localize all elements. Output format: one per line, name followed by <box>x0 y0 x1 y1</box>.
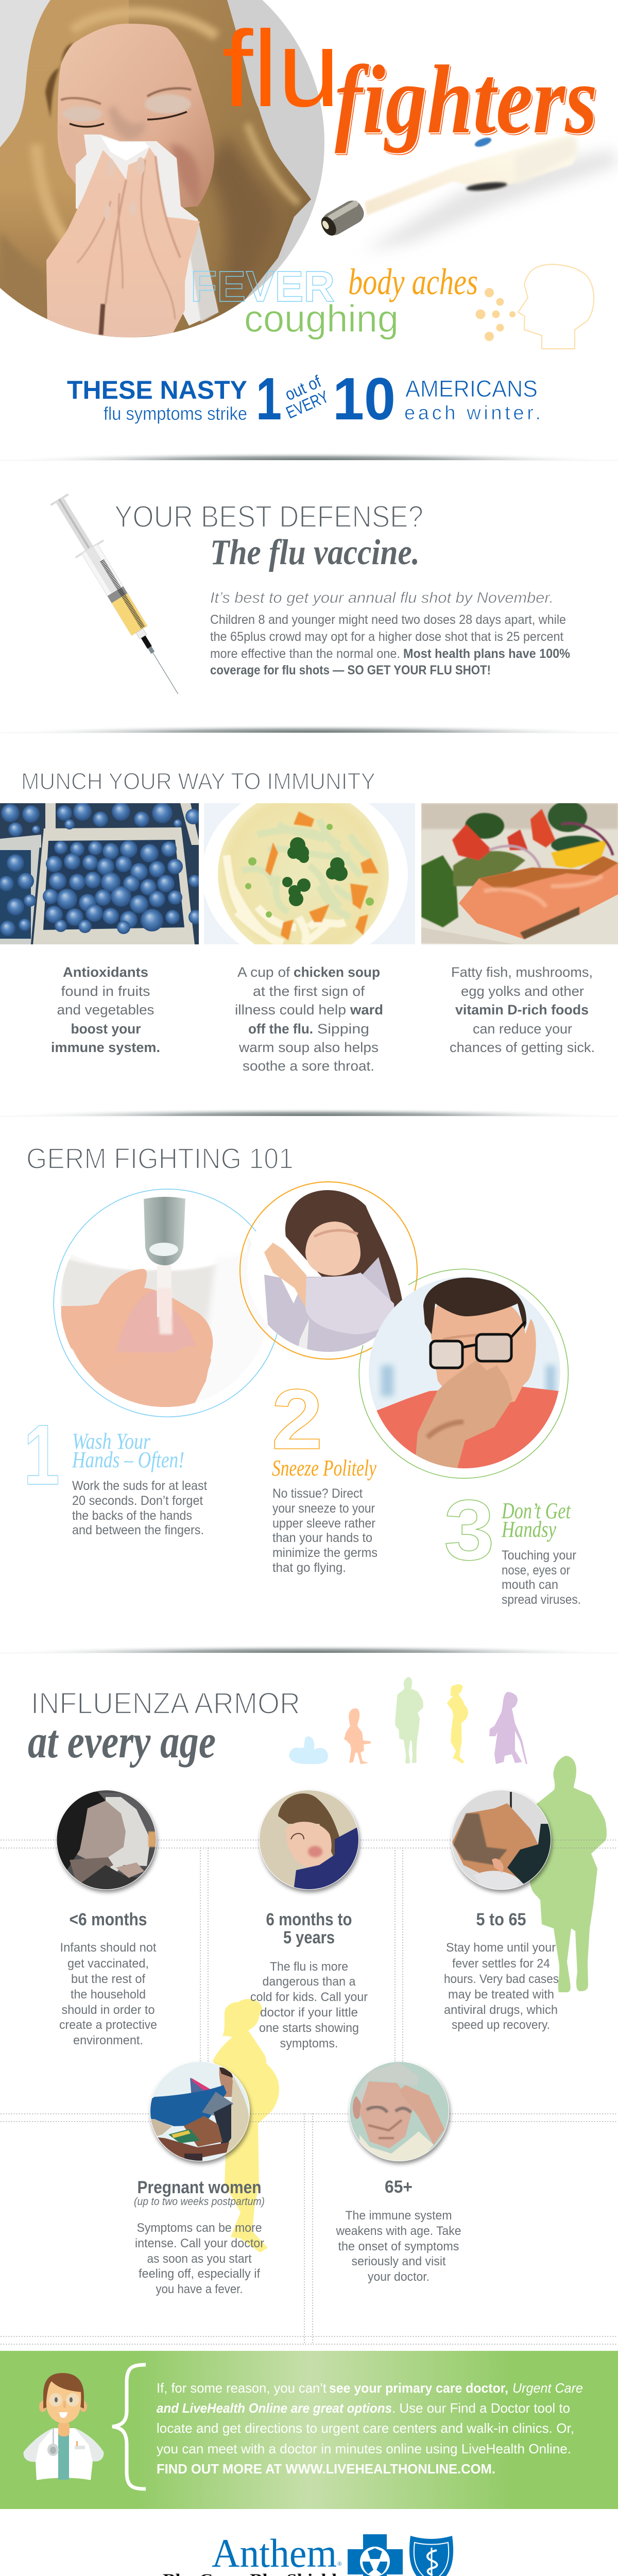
text: pregnant women: feeling off, especially if <box>139 2267 260 2281</box>
text: chicken soup: Sipping <box>317 1021 369 1037</box>
tip 2: sneeze politely: minimize the germs <box>272 1546 377 1560</box>
text: 6 months to 5 years: 5 years <box>283 1928 335 1947</box>
text: 65 plus: seriously and visit <box>351 2255 446 2268</box>
text: pregnant women: as soon as you start <box>147 2252 252 2266</box>
text: 5 to 65: hours. Very bad cases <box>444 1972 559 1986</box>
text: vaccine advice: the 65plus crowd may opt for a higher dose shot that is 25 percent <box>210 630 563 644</box>
stat: these nasty flu symptoms strike 1 out of every 10 Americans each winter <box>67 365 541 432</box>
section divider <box>0 725 618 741</box>
text: 6 months to 5 years: 6 months to <box>266 1910 352 1929</box>
heading: germ fighting 101: GERM FIGHTING 101 <box>26 1142 294 1175</box>
text: chicken soup: illness could help <box>235 1002 346 1018</box>
text: pregnant women: (up to two weeks postpartum) <box>134 2196 265 2208</box>
text: urgent care options: you can meet with a doctor in minutes online using LiveHealth Online. <box>157 2441 571 2456</box>
stat: these nasty flu symptoms strike 1 out of every 10 Americans each winter: out of <box>282 371 324 404</box>
text: 5 to 65: Stay home until your <box>446 1941 556 1955</box>
photo: sneezing into sleeve <box>249 1190 402 1352</box>
text: 65 plus: your doctor. <box>368 2270 430 2284</box>
tip 3: don't get handsy: nose, eyes or <box>502 1563 570 1578</box>
text: 6 months to 5 years: cold for kids. Call your <box>250 1990 368 2004</box>
text: under 6 months: Infants should not <box>60 1941 157 1955</box>
text: vaccine advice: coverage for flu shots — SO GET YOUR FLU SHOT! <box>210 663 491 677</box>
text: vitamin D foods: vitamin D-rich foods <box>455 1002 589 1018</box>
text: chicken soup: chicken soup <box>294 964 380 980</box>
text: vitamin D foods: Fatty fish, mushrooms, <box>451 964 593 980</box>
text: urgent care options: and LiveHealth Online are great options <box>157 2400 392 2416</box>
section divider <box>0 452 618 468</box>
silhouette: large pregnant woman behind text <box>213 1999 279 2252</box>
text: urgent care options <box>157 2380 583 2477</box>
text: urgent care options: . Use our Find a Doctor tool to <box>392 2400 570 2416</box>
text: chicken soup: off the flu. <box>248 1021 313 1037</box>
photo: pregnant woman reading <box>150 2061 250 2161</box>
photo: man touching nose <box>369 1277 561 1473</box>
number 1: 1 <box>24 1408 60 1503</box>
silhouettes: stages of life <box>289 1677 527 1764</box>
heading: influenza armor: INFLUENZA ARMOR <box>31 1687 300 1720</box>
tip 3: don't get handsy: mouth can <box>502 1578 558 1592</box>
text: 65 plus: The immune system <box>345 2209 452 2223</box>
text: antioxidants: and vegetables <box>57 1002 154 1018</box>
section divider <box>0 1645 618 1661</box>
tip 3: don't get handsy <box>444 1483 581 1607</box>
tip 3: don't get handsy: Handsy <box>501 1517 556 1542</box>
text: 65 plus: the onset of symptoms <box>338 2240 459 2253</box>
stat: these nasty flu symptoms strike 1 out of every 10 Americans each winter: each winter. <box>404 402 541 424</box>
text: antioxidants: found in fruits <box>61 984 150 999</box>
ring: hand washing <box>54 1189 277 1417</box>
icon: coughing head with droplets <box>476 264 594 349</box>
text: urgent care options: FIND OUT MORE AT WWW.LIVEHEALTHONLINE.COM. <box>157 2461 495 2477</box>
number 2: 2 <box>271 1372 323 1467</box>
silhouette: pregnant woman <box>447 1684 468 1764</box>
text: 5 to 65: may be treated with <box>448 1988 554 2002</box>
icon: doctor <box>24 2373 104 2480</box>
photo: salmon with salad <box>421 801 618 944</box>
text: pregnant women: you have a fever. <box>156 2282 243 2296</box>
text: antioxidants <box>51 964 160 1055</box>
thermometer <box>317 135 618 251</box>
text: 6 months to 5 years: one starts showing <box>259 2021 359 2035</box>
text: under 6 months: <6 months <box>69 1910 147 1929</box>
panel: find a doctor band <box>0 2351 618 2509</box>
text: chicken soup <box>235 964 383 1074</box>
silhouette: large man behind text <box>530 1756 607 1992</box>
text: 65 plus <box>336 2177 461 2284</box>
silhouette: baby <box>289 1736 328 1764</box>
text: under 6 months: create a protective <box>59 2018 157 2032</box>
logo: Anthem BlueCross BlueShield: ® <box>337 2560 342 2567</box>
text: 6 months to 5 years: doctor if your little <box>260 2006 358 2020</box>
icon: blue cross <box>348 2534 403 2576</box>
ring: touching face <box>359 1269 568 1478</box>
photo: sleeping baby <box>57 1790 157 1891</box>
tip 2: sneeze politely: Sneeze Politely <box>272 1455 376 1481</box>
text: 5 to 65: antiviral drugs, which <box>444 2003 558 2017</box>
hero photo: woman sneezing into tissue <box>0 0 324 341</box>
text: pregnant women: Symptoms can be more <box>137 2221 262 2235</box>
symptom word: fever: FEVER <box>191 262 335 311</box>
ring: sneeze <box>240 1182 417 1359</box>
text: vitamin D foods: egg yolks and other <box>461 984 584 999</box>
tip 2: sneeze politely: that go flying. <box>272 1561 346 1575</box>
heading: at every age: at every age <box>28 1715 216 1768</box>
number 3: 3 <box>444 1483 494 1578</box>
logo: Anthem BlueCross BlueShield: Anthem <box>212 2531 337 2575</box>
photo: washing hands <box>60 1197 252 1407</box>
section divider <box>0 1108 618 1124</box>
text: under 6 months: but the rest of <box>71 1972 145 1986</box>
text: chicken soup: soothe a sore throat. <box>243 1058 374 1074</box>
tip 2: sneeze politely: your sneeze to your <box>272 1501 375 1516</box>
text: pregnant women: intense. Call your doctor <box>135 2236 264 2250</box>
tip 1: wash your hands: 20 seconds. Don’t forget <box>72 1494 203 1508</box>
tip 3: don't get handsy: Don’t Get <box>501 1498 571 1523</box>
tip 1: wash your hands: Wash Your <box>72 1429 151 1454</box>
text: urgent care options: Urgent Care <box>512 2380 583 2396</box>
text: 6 months to 5 years: symptoms. <box>280 2037 338 2050</box>
text: vaccine advice: Children 8 and younger might need two doses 28 days apart, while <box>210 613 566 627</box>
silhouette: child <box>344 1708 371 1764</box>
text: 6 months to 5 years <box>250 1910 368 2050</box>
text: 6 months to 5 years: The flu is more <box>270 1960 348 1974</box>
heading: your best defense: YOUR BEST DEFENSE? <box>114 500 423 534</box>
photo: blueberries <box>0 802 203 944</box>
text: under 6 months: should in order to <box>62 2003 154 2017</box>
stat: these nasty flu symptoms strike 1 out of every 10 Americans each winter: 10 <box>333 365 396 432</box>
tip 3: don't get handsy: spread viruses. <box>502 1592 581 1607</box>
text: 5 to 65: speed up recovery. <box>452 2018 550 2032</box>
text: under 6 months: the household <box>71 1988 146 2002</box>
tip 1: wash your hands: and between the fingers. <box>72 1523 204 1537</box>
text: vitamin D foods: can reduce your <box>473 1021 572 1037</box>
tip 2: sneeze politely: No tissue? Direct <box>272 1486 363 1501</box>
symptom word: coughing: coughing <box>244 297 399 340</box>
text: pregnant women: Pregnant women <box>137 2178 262 2197</box>
text: urgent care options: see your primary care doctor, <box>329 2380 508 2396</box>
photo: older man with headache <box>349 2061 449 2164</box>
tip 3: don't get handsy: Touching your <box>502 1548 576 1563</box>
title: flu: flu <box>222 8 340 129</box>
silhouette: man <box>395 1677 423 1764</box>
heading: the flu vaccine: The flu vaccine. <box>210 533 420 572</box>
tip 2: sneeze politely <box>271 1372 377 1575</box>
text: vaccine advice: It’s best to get your annual flu shot by November. <box>210 589 554 606</box>
brace <box>112 2365 146 2489</box>
text: vaccine advice: Most health plans have 100% <box>403 647 570 661</box>
photo: sleeping toddler <box>259 1790 359 1891</box>
text: under 6 months: environment. <box>73 2033 143 2047</box>
text: under 6 months: get vaccinated, <box>67 1957 149 1971</box>
silhouette: old woman <box>489 1692 527 1764</box>
text: 65 plus: 65+ <box>385 2177 413 2197</box>
tip 2: sneeze politely: upper sleeve rather <box>272 1516 375 1531</box>
text: vitamin D foods <box>450 964 595 1055</box>
tip 1: wash your hands: Hands – Often! <box>72 1447 184 1472</box>
text: 6 months to 5 years: dangerous than a <box>263 1975 356 1989</box>
text: chicken soup: A cup of <box>237 964 290 980</box>
text: vaccine advice: more effective than the normal one. <box>210 647 400 661</box>
text: antioxidants: boost your <box>71 1021 141 1037</box>
text: 5 to 65: 5 to 65 <box>476 1910 526 1929</box>
text: antioxidants: Antioxidants <box>63 964 148 980</box>
logo: Anthem BlueCross BlueShield <box>163 2531 453 2576</box>
stat: these nasty flu symptoms strike 1 out of every 10 Americans each winter: flu symptoms strike <box>104 403 247 424</box>
text: 65 plus: weakens with age. Take <box>336 2224 461 2238</box>
photo: chicken soup <box>204 803 415 944</box>
photo: resting man <box>451 1790 551 1891</box>
text: 5 to 65: fever settles for 24 <box>452 1957 550 1971</box>
icon: blue shield <box>409 2536 453 2576</box>
text: urgent care options: If, for some reason, you can’t <box>157 2380 327 2396</box>
text: antioxidants: immune system. <box>51 1040 160 1055</box>
text: under 6 months <box>59 1910 157 2047</box>
text: chicken soup: ward <box>350 1002 383 1018</box>
heading: munch your way to immunity: MUNCH YOUR WAY TO IMMUNITY <box>21 768 375 794</box>
symptom word: body aches: body aches <box>348 261 478 302</box>
text: pregnant women <box>134 2178 265 2296</box>
tip 1: wash your hands: the backs of the hands <box>72 1509 192 1523</box>
tip 1: wash your hands <box>24 1408 207 1537</box>
text: urgent care options: locate and get directions to urgent care centers and walk-in clinics. Or, <box>157 2420 574 2436</box>
stat: these nasty flu symptoms strike 1 out of every 10 Americans each winter: 1 <box>256 365 282 432</box>
stat: these nasty flu symptoms strike 1 out of every 10 Americans each winter: THESE NASTY <box>67 376 247 404</box>
text: chicken soup: at the first sign of <box>253 984 365 999</box>
text: vitamin D foods: chances of getting sick. <box>450 1040 595 1055</box>
text: vaccine advice <box>210 589 570 677</box>
icon: syringe <box>45 490 192 703</box>
text: 5 to 65 <box>444 1910 559 2032</box>
stat: these nasty flu symptoms strike 1 out of every 10 Americans each winter: AMERICANS <box>405 376 538 402</box>
stat: these nasty flu symptoms strike 1 out of every 10 Americans each winter: EVERY <box>283 387 331 422</box>
text: chicken soup: warm soup also helps <box>238 1040 379 1055</box>
tip 1: wash your hands: Work the suds for at least <box>72 1479 207 1493</box>
tip 2: sneeze politely: than your hands to <box>272 1531 372 1545</box>
